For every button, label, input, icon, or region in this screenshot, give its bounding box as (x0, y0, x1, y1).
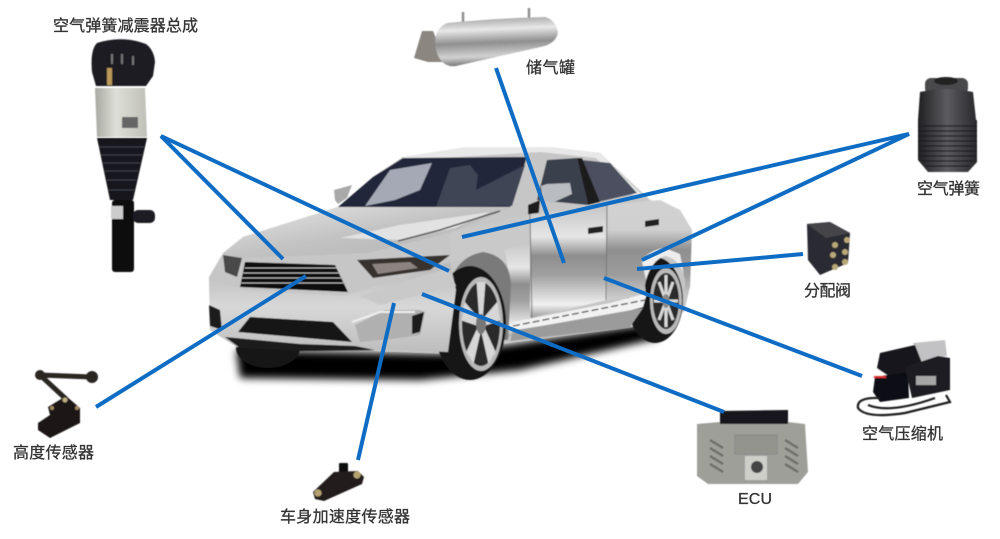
hood (223, 207, 510, 258)
part: distribution valve (807, 222, 850, 275)
car body (209, 147, 692, 353)
label: air tank: 储气罐 (526, 59, 575, 77)
leader lines (96, 68, 909, 460)
label: air spring: 空气弹簧 (917, 179, 980, 198)
front door (530, 205, 607, 318)
front wheel arch (447, 252, 511, 340)
lower grille (238, 317, 352, 342)
headlights (357, 255, 450, 278)
part: air spring strut assembly (92, 39, 155, 272)
arrow: height sensor to car (96, 276, 306, 407)
fog lamp recess (355, 310, 425, 342)
label: height sensor: 高度传感器 (13, 444, 94, 462)
windshield (338, 157, 527, 207)
part: air compressor (858, 340, 950, 415)
label: air compressor: 空气压缩机 (862, 425, 943, 443)
side mirrors (541, 183, 572, 203)
rear wheel (627, 257, 683, 343)
arrow: valve to car (637, 254, 803, 269)
front left wheel (236, 328, 300, 368)
arrow: strut to front suspension (161, 136, 449, 271)
label: air spring strut assembly: 空气弹簧减震器总成 (53, 16, 198, 35)
arrow: tank to car (496, 68, 564, 263)
door handles (588, 226, 603, 234)
part: body acceleration sensor (313, 463, 364, 501)
ground shadow (236, 325, 660, 380)
rear door (607, 200, 692, 300)
part: air spring (918, 77, 977, 172)
label: body acceleration sensor: 车身加速度传感器 (280, 508, 410, 526)
arrow: compressor to car (604, 278, 862, 376)
part: height sensor (35, 370, 98, 438)
side sill (513, 293, 647, 330)
part: ECU (697, 410, 808, 484)
label: distribution valve: 分配阀 (804, 282, 851, 300)
roof highlight (403, 147, 645, 198)
label: ECU: ECU (738, 491, 772, 508)
part: air tank (414, 8, 558, 66)
door seam (530, 205, 607, 318)
front fender (450, 214, 532, 338)
car illustration (209, 147, 692, 380)
arrow: acceleration sensor to car (358, 303, 394, 460)
side windows (537, 158, 588, 205)
front wheel (434, 266, 506, 380)
arrow: air spring to car (462, 134, 909, 260)
bumper (209, 262, 456, 352)
arrow: ECU to car (422, 294, 724, 412)
grille (240, 262, 348, 292)
